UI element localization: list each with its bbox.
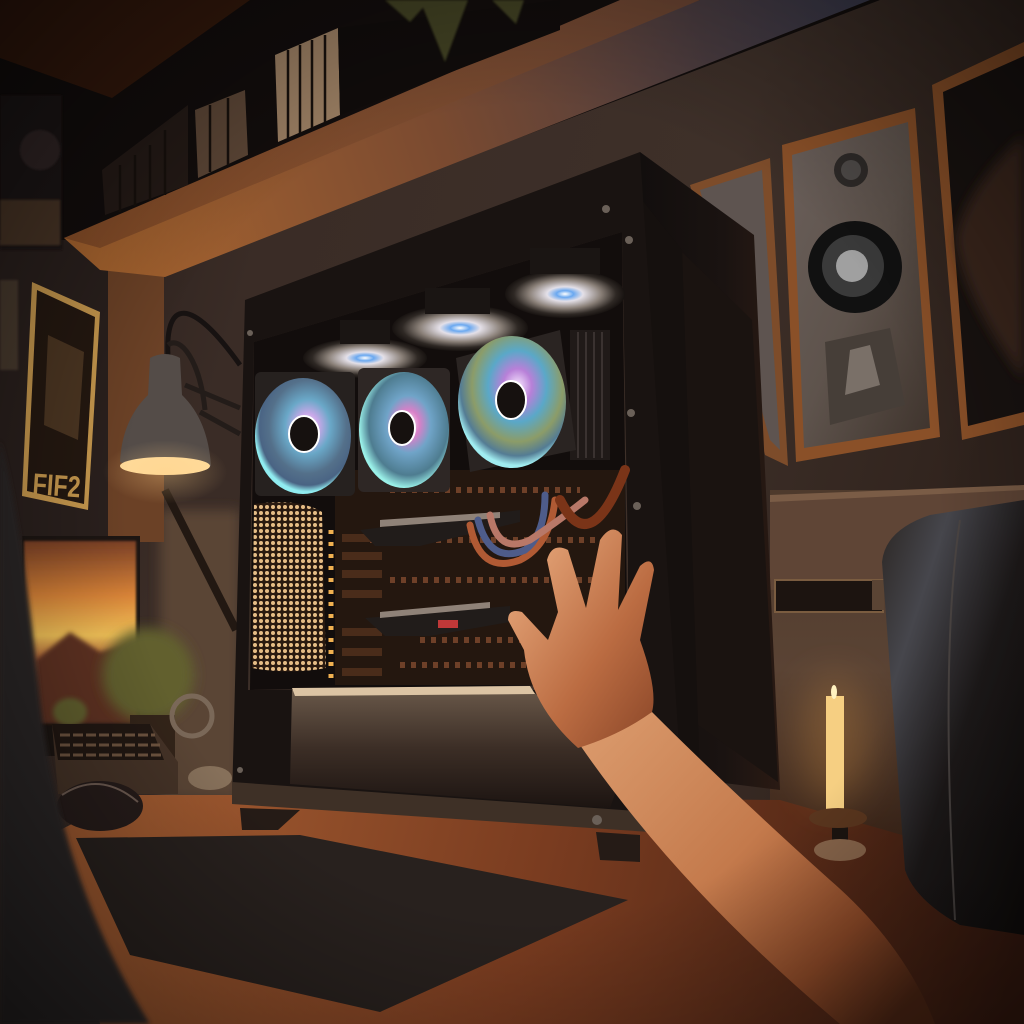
graphics card lower: [365, 602, 510, 636]
desk lamp: [103, 313, 240, 630]
wall vent: [775, 580, 884, 612]
case side panel: [640, 152, 780, 790]
mouse pad: [76, 835, 628, 1012]
case front column: [622, 175, 700, 780]
mesh vent panel: [252, 502, 326, 672]
framed picture: sunset monitor: [22, 536, 140, 756]
radiator: [570, 330, 610, 460]
bottom edge: [232, 782, 650, 832]
case interior: [250, 232, 628, 690]
left wall art: [0, 95, 62, 370]
cable bundle: [470, 470, 625, 563]
desk surface: [60, 795, 1024, 1024]
pc case: [232, 152, 780, 862]
expansion slots: [342, 534, 382, 676]
screws: [237, 205, 641, 825]
fan front 1: [255, 372, 355, 496]
foreground blurred shoulder: [0, 440, 150, 1024]
motherboard: [335, 470, 625, 685]
desk ornament: [172, 696, 232, 790]
arm and hand: [508, 530, 935, 1024]
fan top 2: [392, 288, 528, 351]
mouse: [57, 781, 143, 831]
candle: [799, 676, 871, 861]
fan top 1: [303, 320, 427, 378]
keyboard: [52, 724, 178, 794]
plant: [53, 628, 194, 760]
shelf: [64, 0, 870, 277]
fan top 3: [505, 248, 625, 318]
fan front 3: [456, 330, 576, 472]
graphics card upper: [360, 510, 520, 546]
framed poster with gold border: [22, 282, 100, 510]
case foot: [240, 808, 300, 830]
fan front 2: [358, 368, 450, 492]
books on shelf: [102, 0, 560, 215]
wooden post: [108, 262, 164, 542]
plants on shelf: [385, 0, 524, 62]
right framed posters: [690, 42, 1024, 466]
power supply shroud: [290, 688, 620, 808]
poster lettering: FIF2: [32, 468, 82, 504]
right speaker: [882, 500, 1024, 935]
case front frame: [232, 152, 680, 830]
